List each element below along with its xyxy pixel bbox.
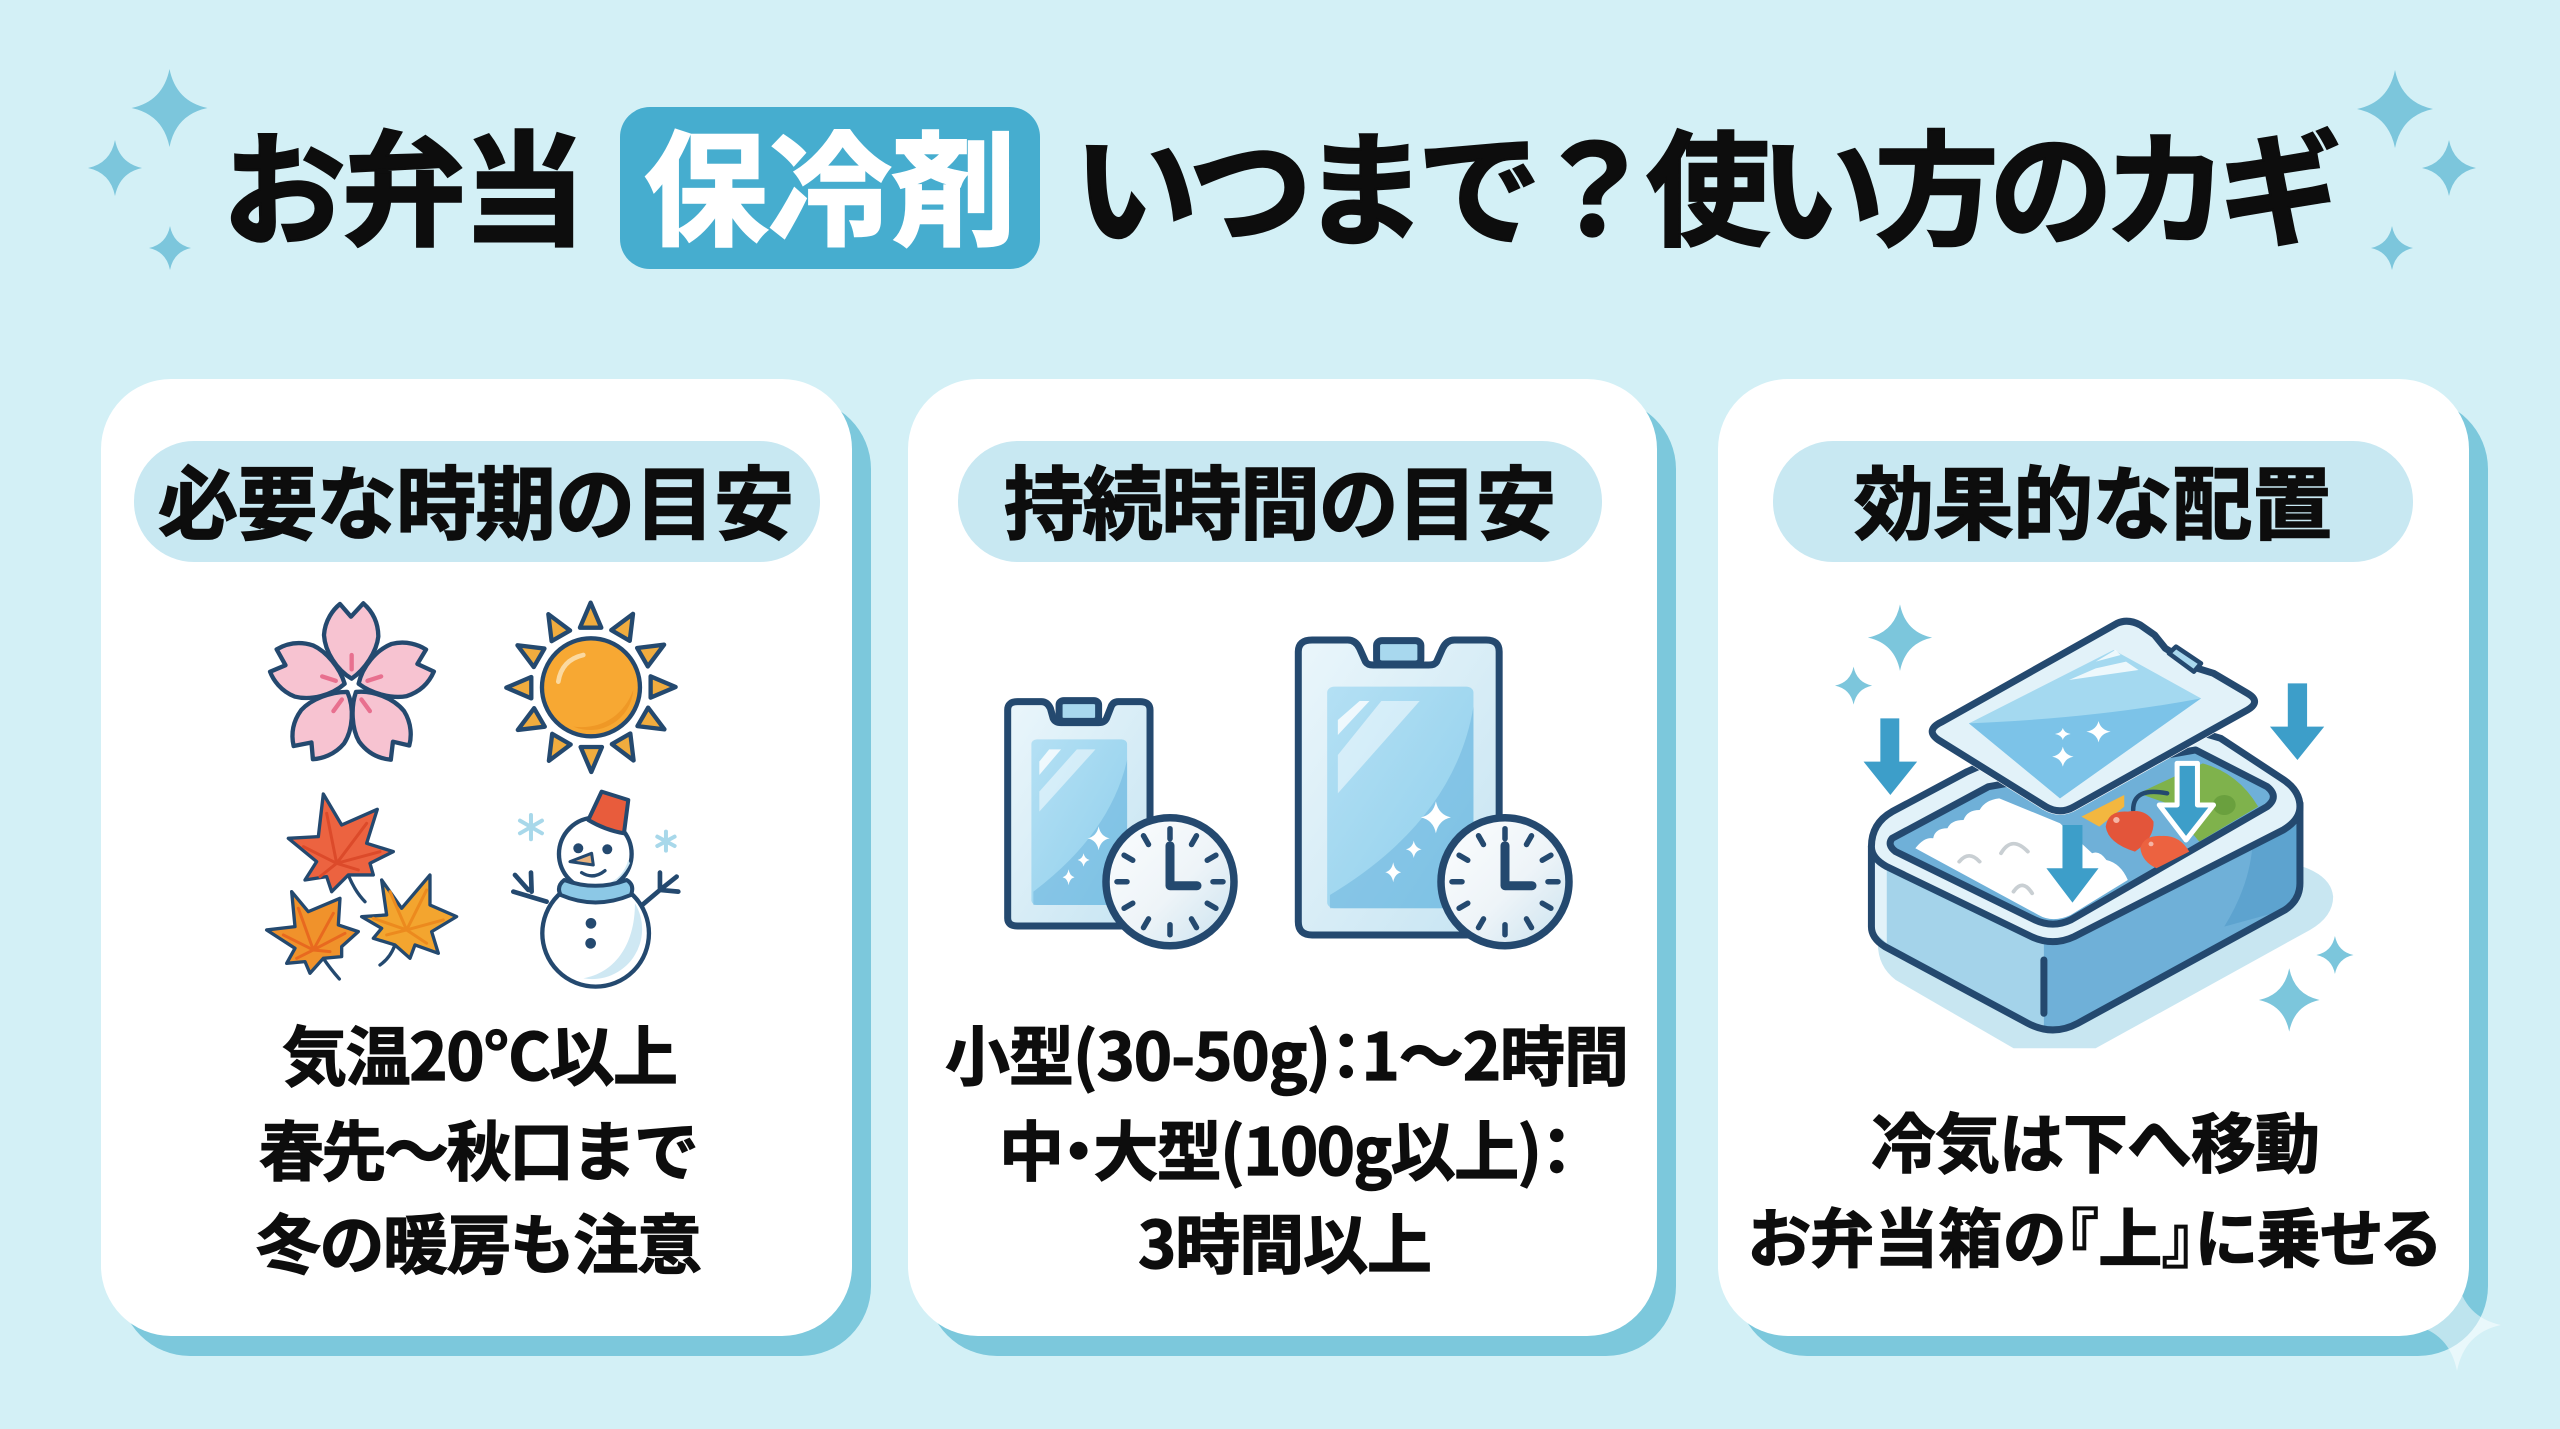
text: duration guidance: 中・大型(100g以上)： — [999, 1100, 1573, 1194]
card with shadow — [101, 379, 871, 1356]
illustration: bento box with ice pack — [1835, 604, 2354, 1048]
icon: clock for large pack — [1441, 818, 1569, 946]
box ground shadow — [1878, 867, 2333, 1048]
box rim — [1871, 707, 2300, 942]
text: duration guidance — [945, 1005, 1629, 1287]
box interior — [1890, 750, 2273, 924]
title: お弁当 — [222, 91, 586, 271]
icon: clock for small pack — [1106, 818, 1234, 946]
heading pill: season guide: 必要な時期の目安 — [158, 441, 794, 557]
text: placement guidance: お弁当箱の『上』に乗せる — [1748, 1189, 2440, 1281]
icon: large ice pack — [1298, 640, 1499, 935]
text: season guidance: 冬の暖房も注意 — [256, 1193, 702, 1287]
text: placement guidance: 冷気は下へ移動 — [1871, 1092, 2320, 1186]
panel: season guide — [101, 379, 871, 1356]
text: duration guidance: 3時間以上 — [1138, 1193, 1432, 1287]
text: season guidance: 春先～秋口まで — [259, 1100, 699, 1194]
title: いつまで？使い方のカギ — [1074, 91, 2342, 271]
watermark sparkle — [2413, 1279, 2501, 1371]
panel: placement — [1718, 379, 2488, 1356]
sparkles around bento — [1835, 604, 2354, 1032]
arrow: cold air left — [1864, 718, 1917, 795]
arrow: cold air into side dishes — [2159, 763, 2214, 840]
rice — [1915, 798, 2128, 919]
ice pack lid — [1932, 621, 2255, 811]
heading pill: duration guide: 持続時間の目安 — [1004, 441, 1556, 557]
card with shadow — [908, 379, 1676, 1356]
side dishes — [2081, 763, 2258, 868]
panel: duration guide — [908, 379, 1676, 1356]
text: season guidance: 気温20°C以上 — [282, 1005, 678, 1099]
icon: autumn leaves — [267, 794, 457, 979]
text: season guidance — [256, 1005, 702, 1287]
icon: cherry blossom — [264, 603, 439, 769]
arrow: cold air right — [2270, 683, 2324, 760]
icon: snowman — [513, 792, 678, 987]
icon: sun — [506, 603, 676, 772]
icon: small ice pack — [1008, 701, 1150, 926]
decorative sparkles right of title — [2357, 70, 2476, 270]
title highlight badge: 保冷剤 — [644, 91, 1016, 271]
decorative sparkles left of title — [88, 69, 208, 270]
text: duration guidance: 小型(30-50g)：1～2時間 — [945, 1005, 1629, 1099]
title — [222, 91, 2342, 271]
text: placement guidance — [1748, 1092, 2440, 1281]
card with shadow — [1718, 379, 2488, 1356]
arrow: cold air into rice — [2046, 825, 2099, 903]
box body — [1871, 803, 2300, 1031]
heading pill: placement: 効果的な配置 — [1854, 441, 2332, 557]
